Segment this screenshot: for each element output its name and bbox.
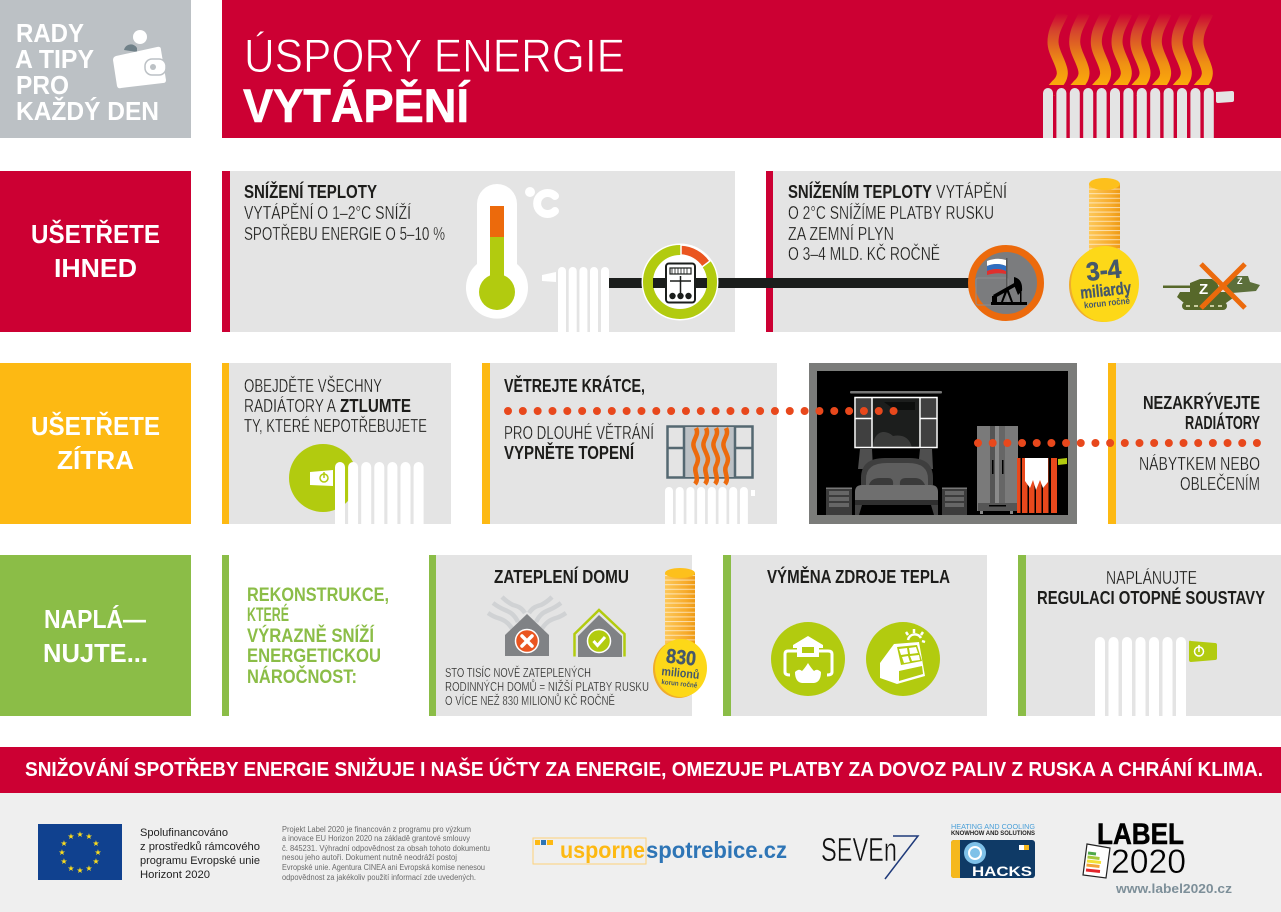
pipe — [609, 278, 969, 288]
title: ÚSPORY ENERGIE — [244, 29, 625, 82]
icon: coins 830 million: korun ročně — [661, 679, 698, 690]
text: regulation — [1037, 568, 1265, 608]
icon: oil pump with Russian flag — [972, 248, 1040, 318]
text: turn down: RADIÁTORY A — [244, 396, 336, 416]
icon: coins 3-4 billion: miliardy — [1079, 278, 1132, 303]
icon: energy meter gauge — [642, 244, 718, 320]
footer — [0, 793, 1281, 912]
label: save now: UŠETŘETE — [31, 219, 160, 249]
icon: wallet — [113, 30, 166, 88]
icon: thermostat circle — [289, 444, 357, 512]
logo: HACKS: KNOWHOW AND SOLUTIONS — [951, 831, 1035, 837]
link: website: www.label2020.cz — [1115, 881, 1233, 896]
icon: radiator — [665, 487, 755, 524]
heading: tips: KAŽDÝ DEN — [16, 96, 159, 126]
logo: LABEL 2020: LABEL — [1097, 818, 1184, 851]
text: turn down: ZTLUMTE — [340, 396, 411, 416]
icon: EU flag: ★ — [60, 857, 68, 866]
icon: EU flag: ★ — [76, 866, 84, 875]
icon: EU flag: ★ — [85, 832, 93, 841]
text: Russia payments: O 3–4 MLD. KČ ROČNĚ — [788, 243, 940, 264]
text: co-funding: Spolufinancováno — [140, 827, 228, 839]
label: save tomorrow: UŠETŘETE — [31, 411, 160, 441]
icon: insulated house — [574, 610, 624, 657]
logo: SEVEn: SEVEn — [821, 831, 897, 868]
panel: lower temperature — [222, 171, 735, 332]
text: Russia payments: VYTÁPĚNÍ — [936, 182, 1007, 202]
text: Russia payments: O 2°C SNÍŽÍME PLATBY RUSKU — [788, 203, 994, 223]
icon: EU flag: ★ — [85, 864, 93, 873]
curtains — [858, 449, 933, 469]
icon: coins 3-4 billion: korun ročně — [1084, 296, 1130, 310]
logo: usporne spotrebice — [533, 837, 787, 864]
icon: EU flag: ★ — [94, 848, 102, 857]
text: insulation: O VÍCE NEŽ 830 MILIONŮ KČ ROČNĚ — [445, 693, 615, 708]
icon: coins 830 million — [653, 568, 707, 698]
logo: usporne spotrebice: spotrebice.cz — [646, 837, 787, 863]
text: ventilate: VĚTREJTE KRÁTCE, — [504, 375, 645, 396]
text: disclaimer: Projekt Label 2020 je financován z programu pro výzkum — [282, 825, 471, 834]
banner: conclusion — [0, 747, 1281, 793]
panel: bedroom illustration — [809, 363, 1077, 524]
text block: renovation: KTERÉ — [247, 604, 289, 626]
panel: turn down radiators — [222, 363, 451, 524]
logo: LABEL 2020: 2020 — [1111, 843, 1186, 881]
icon: coins 3-4 billion: 3-4 — [1085, 253, 1123, 287]
icon: heat waves — [1050, 13, 1208, 92]
icon: thermometer — [466, 184, 555, 319]
text: disclaimer — [282, 825, 490, 882]
text: disclaimer: odpovědnost za jakékoliv použití informací zde uvedených. — [282, 873, 476, 882]
text: turn down: TY, KTERÉ NEPOTŘEBUJETE — [244, 416, 427, 436]
panel: tips badge — [0, 0, 191, 138]
logo: LABEL 2020 — [1083, 818, 1186, 881]
text: disclaimer: Evropské unie. Agentura CINEA ani Evropská komise nenesou — [282, 863, 485, 872]
icon: crossed tanks — [1163, 264, 1260, 310]
wardrobe — [977, 426, 1018, 514]
logo: HACKS — [951, 822, 1035, 879]
panel: title banner — [222, 0, 1281, 138]
text block: renovation: ENERGETICKOU — [247, 646, 381, 667]
text: lower temperature — [244, 181, 445, 244]
icon: radiator with thermostat — [1095, 637, 1217, 716]
text: ventilate: PRO DLOUHÉ VĚTRÁNÍ — [504, 423, 654, 443]
text: co-funding: programu Evropské unie — [140, 855, 260, 867]
icon: EU flag — [38, 824, 122, 880]
text block: renovation: VÝRAZNĚ SNÍŽÍ — [247, 625, 375, 647]
icon: crossed tanks: Z — [1199, 281, 1208, 298]
heading: tips — [15, 18, 159, 126]
text: regulation: NAPLÁNUJTE — [1106, 568, 1197, 588]
text: do not cover — [1139, 392, 1260, 494]
icon: EU flag: ★ — [67, 864, 75, 873]
label: plan — [0, 555, 191, 716]
text: ventilate: VYPNĚTE TOPENÍ — [504, 442, 635, 463]
label: plan: NAPLÁ— — [44, 604, 146, 634]
text: turn down: OBEJDĚTE VŠECHNY — [244, 375, 382, 396]
text: Russia payments: SNÍŽENÍM TEPLOTY — [788, 181, 932, 202]
dotted line: radiator — [978, 439, 1259, 447]
text: disclaimer: a inovace EU Horizon 2020 na základě grantové smlouvy — [282, 834, 470, 843]
logo: HACKS: HACKS — [972, 863, 1032, 879]
heading: tips: PRO — [16, 70, 69, 100]
icon: radiator — [1043, 88, 1234, 138]
text: ventilate — [504, 375, 654, 463]
icon: biomass cycle — [771, 622, 845, 696]
text: Russia payments: ZA ZEMNÍ PLYN — [788, 224, 894, 244]
heading: tips: RADY — [16, 18, 84, 48]
panel: heat source replacement — [723, 555, 987, 716]
icon: crossed tanks: Z — [1237, 276, 1243, 286]
label: save tomorrow: ZÍTRA — [57, 445, 134, 475]
label: save now: IHNED — [54, 253, 137, 283]
text block: renovation: NÁROČNOST: — [247, 666, 357, 688]
panel: heating regulation — [1018, 555, 1281, 716]
nightstands — [826, 488, 967, 515]
text: Russia payments — [788, 181, 1007, 264]
icon: open window — [667, 426, 753, 484]
text: disclaimer: nesou jeho autoři. Dokument nutně neodráží postoj — [282, 853, 457, 862]
dotted line: window — [508, 407, 896, 415]
icon: EU flag: ★ — [67, 832, 75, 841]
text: co-funding: Horizont 2020 — [140, 869, 210, 881]
label: plan: NUJTE... — [43, 638, 148, 668]
panel: Russia payments — [766, 171, 1281, 332]
icon: EU flag: ★ — [76, 830, 84, 839]
logo: HACKS: HEATING AND COOLING — [951, 822, 1035, 831]
text block: renovation — [222, 555, 389, 716]
icon: EU flag: ★ — [92, 839, 100, 848]
bed — [855, 458, 938, 515]
text: insulation — [445, 665, 649, 708]
icon: radiator — [335, 462, 424, 524]
heading: heat source: VÝMĚNA ZDROJE TEPLA — [767, 566, 950, 587]
panel: ventilate briefly — [482, 363, 777, 524]
text: insulation: STO TISÍC NOVĚ ZATEPLENÝCH — [445, 665, 591, 680]
hidden radiator — [1017, 458, 1067, 513]
icon: coins 830 million: 830 — [665, 645, 697, 670]
icon: coins 830 million: milionů — [661, 664, 700, 682]
label: save tomorrow — [0, 363, 191, 524]
text: disclaimer: č. 845231. Výhradní odpovědnost za obsah tohoto dokumentu — [282, 844, 490, 853]
curtain rod — [850, 391, 942, 394]
icon: solar house — [866, 622, 940, 696]
subtitle: VYTÁPĚNÍ — [243, 79, 471, 132]
icon: white radiator — [542, 267, 609, 332]
label: save now — [0, 171, 191, 332]
text: lower temperature: SNÍŽENÍ TEPLOTY — [244, 181, 377, 202]
text: lower temperature: SPOTŘEBU ENERGIE O 5–10 % — [244, 224, 445, 244]
icon: leaking house — [488, 597, 566, 656]
icon: EU flag: ★ — [60, 839, 68, 848]
text: co-funding: z prostředků rámcového — [140, 841, 260, 853]
text: co-funding — [140, 827, 260, 881]
text: insulation: RODINNÝCH DOMŮ = NIŽŠÍ PLATBY RUSKU — [445, 679, 649, 694]
heading: tips: A TIPY — [15, 44, 94, 74]
icon: EU flag: ★ — [58, 848, 66, 857]
window — [855, 397, 937, 448]
text: lower temperature: VYTÁPĚNÍ O 1–2°C SNÍŽÍ — [244, 203, 411, 223]
panel: house insulation — [429, 555, 692, 716]
text block: renovation: REKONSTRUKCE, — [247, 585, 389, 606]
heading: insulation: ZATEPLENÍ DOMU — [494, 566, 629, 587]
icon: coins 3-4 billion — [1069, 178, 1139, 322]
icon: EU flag: ★ — [92, 857, 100, 866]
panel: do not cover radiators — [1108, 363, 1281, 524]
logo: usporne spotrebice: usporne — [560, 837, 645, 863]
text: turn down — [244, 375, 427, 436]
